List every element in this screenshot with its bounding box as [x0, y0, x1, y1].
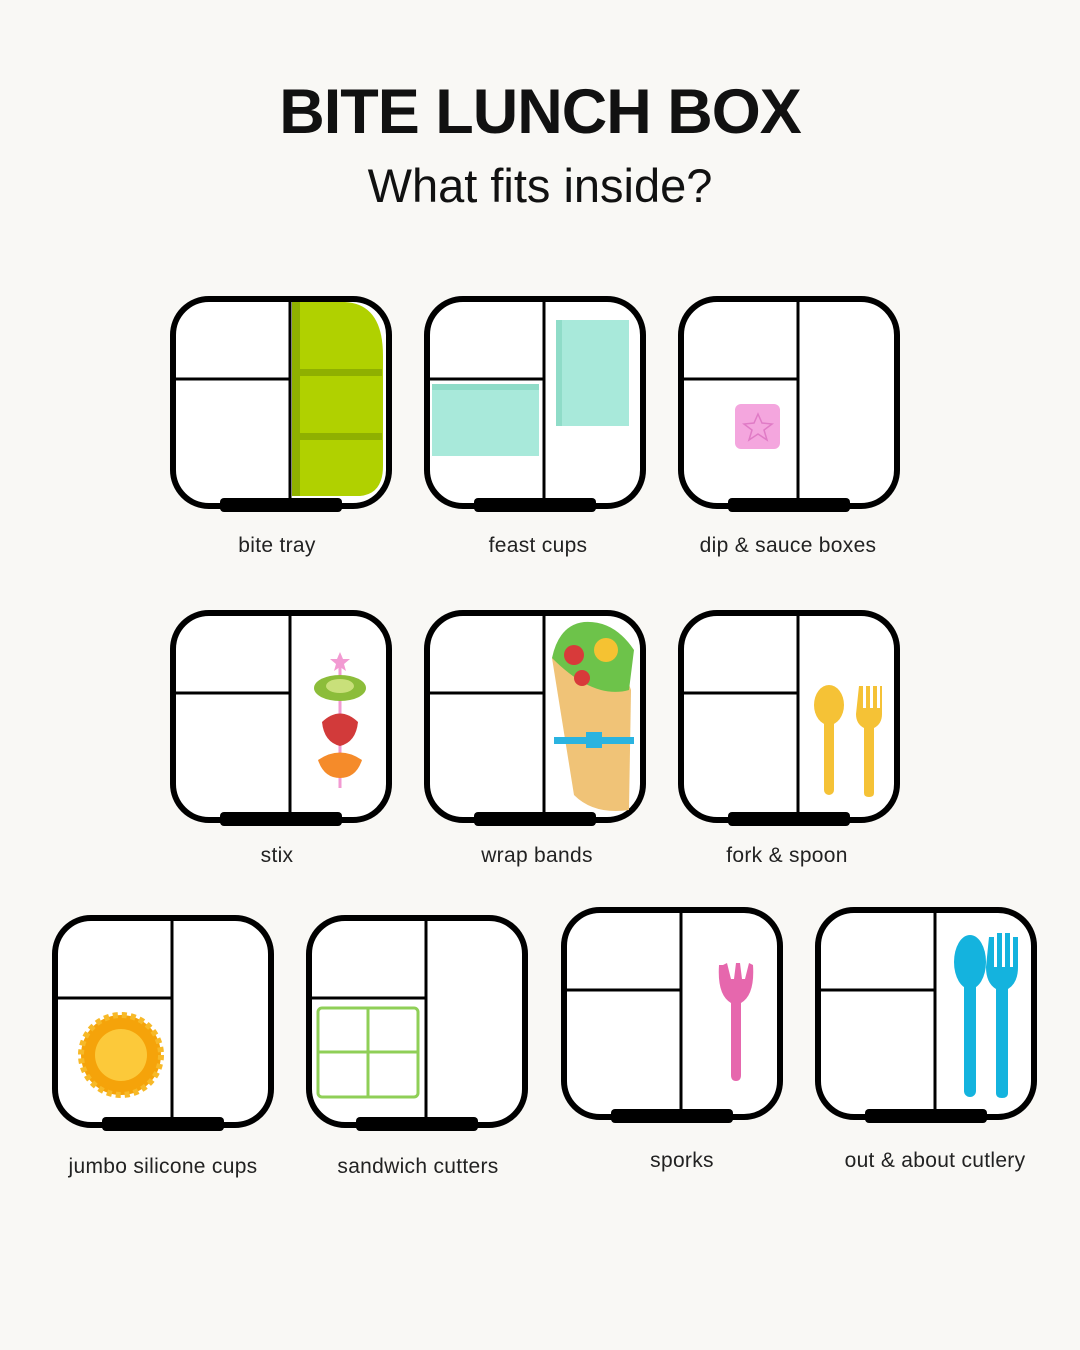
box: stix — [173, 613, 389, 826]
label: feast cups: feast cups — [489, 534, 587, 557]
box: dip & sauce boxes — [681, 299, 897, 512]
subtitle: What fits inside? — [368, 159, 712, 212]
box: jumbo silicone cups — [55, 918, 271, 1131]
label: wrap bands: wrap bands — [481, 844, 593, 867]
box: out & about cutlery — [818, 910, 1034, 1123]
box: fork & spoon — [681, 613, 897, 826]
box: sandwich cutters — [309, 918, 525, 1131]
box: feast cups — [427, 299, 643, 512]
label: out & about cutlery: out & about cutlery — [845, 1149, 1025, 1172]
label: jumbo silicone cups: jumbo silicone cups — [69, 1155, 257, 1178]
label: stix: stix — [261, 844, 293, 867]
box: bite tray — [173, 299, 389, 512]
label: dip & sauce boxes: dip & sauce boxes — [700, 534, 876, 557]
label: fork & spoon: fork & spoon — [726, 844, 848, 867]
label: sporks: sporks — [650, 1149, 714, 1172]
title: BITE LUNCH BOX — [279, 77, 801, 147]
label: bite tray: bite tray — [238, 534, 316, 557]
box: sporks — [564, 910, 780, 1123]
box: wrap bands — [427, 613, 643, 826]
label: sandwich cutters: sandwich cutters — [337, 1155, 499, 1178]
